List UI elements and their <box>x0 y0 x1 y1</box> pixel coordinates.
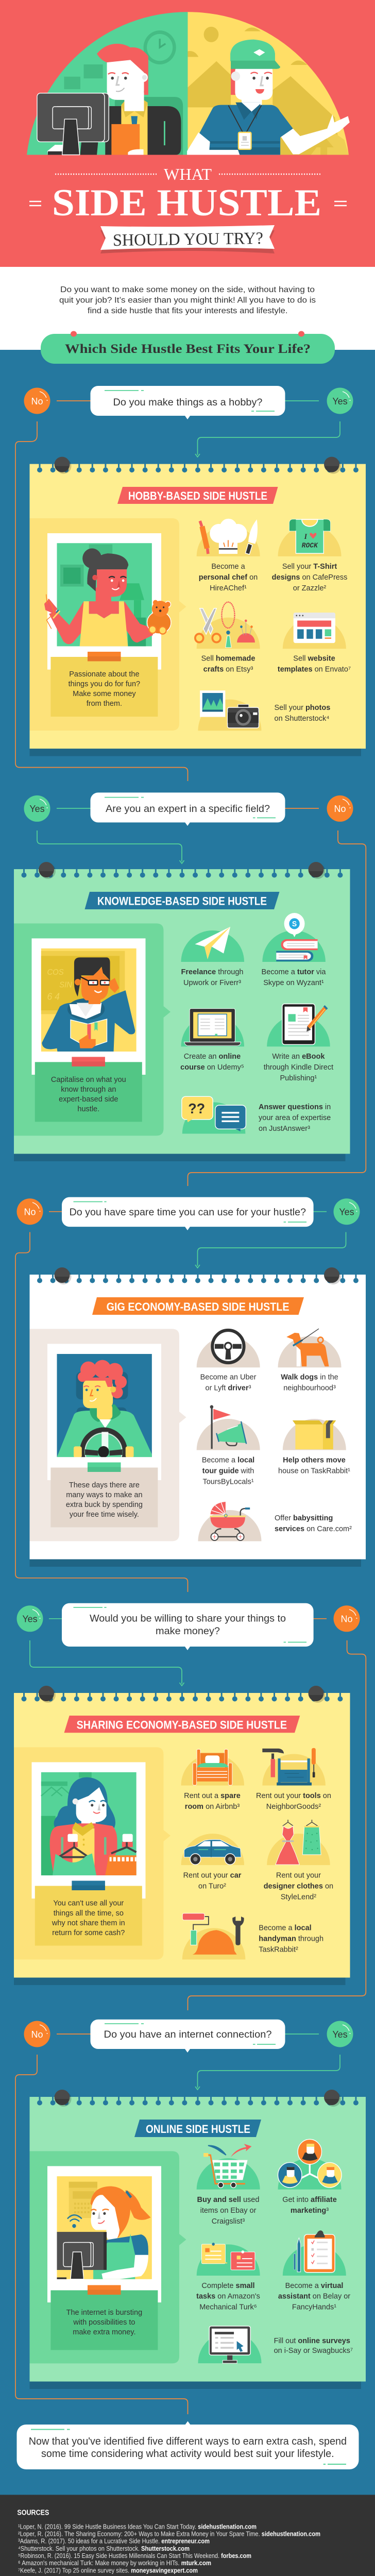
item: t-shirt designs: I <box>304 533 308 541</box>
no button <box>16 1198 43 1225</box>
closing message bubble: Now that you've identified five different ways to earn extra cash, spend <box>29 2436 347 2447</box>
banner: gig <box>92 1297 304 1315</box>
question 5: Do you have an internet connection? <box>104 2029 272 2040</box>
item: website templates: Sell website <box>293 654 335 663</box>
yes button: Yes <box>29 804 45 814</box>
item: walk dogs: Walk dogs in the <box>281 1374 338 1382</box>
item: buy and sell <box>197 2144 260 2226</box>
item: walk dogs <box>278 1329 342 1392</box>
item: freelance <box>181 927 244 987</box>
item: small tasks: Complete small <box>201 2282 255 2290</box>
item: babysitting <box>198 1502 352 1541</box>
banner: knowledge <box>84 892 279 909</box>
item: help others move <box>278 1419 350 1475</box>
illustration: studying teacher: 6 4 <box>47 991 60 1002</box>
caption: sharing: things all the time, so <box>54 1909 124 1918</box>
item: ebook: Write an eBook <box>272 1053 325 1061</box>
arrow: question 3 yes <box>195 1232 346 1268</box>
caption: hobby: from them. <box>87 700 122 708</box>
arrow: question 2 yes <box>37 831 184 863</box>
panel: sharing economy-based side hustle <box>14 1686 350 1985</box>
item: answer questions: on JustAnswer³ <box>259 1125 310 1133</box>
item: online surveys: on i-Say or Swagbucks⁷ <box>274 2347 353 2355</box>
item: buy and sell: Craigslist³ <box>212 2217 245 2226</box>
item: website templates <box>278 613 351 674</box>
question 4 <box>16 1603 360 1650</box>
item: spare room: Rent out a spare <box>184 1792 241 1800</box>
item: personal chef: Become a <box>211 563 246 571</box>
item: answer questions: ?? <box>188 1100 205 1116</box>
intro text: Do you want to make some money on the side, without having to <box>60 285 315 294</box>
closing message bubble: some time considering what activity would best suit your lifestyle. <box>41 2448 334 2460</box>
arrow: question 5 no <box>15 2055 187 2414</box>
banner: online: ONLINE SIDE HUSTLE <box>146 2123 250 2136</box>
item: affiliate marketing: marketing³ <box>291 2207 329 2215</box>
item: online surveys: Fill out online surveys <box>274 2337 350 2345</box>
intro text: find a side hustle that fits your interests and lifestyle. <box>88 307 287 315</box>
item: car: on Turo² <box>198 1883 226 1891</box>
item: tutor via skype: Become a tutor via <box>262 968 326 976</box>
item: tutor via skype <box>262 913 326 987</box>
caption: hobby: Passionate about the <box>69 670 140 679</box>
item: t-shirt designs: Sell your T-Shirt <box>282 563 337 571</box>
panel: sources: ⁷Keefe, J. (2017) Top 25 online survey sites. moneysavingexpert.com <box>18 2567 198 2574</box>
caption: gig: your free time wisely. <box>70 1511 139 1519</box>
question 1: Do you make things as a hobby? <box>113 397 263 408</box>
item: ebook: through Kindle Direct <box>264 1063 333 1072</box>
question 2: Are you an expert in a specific field? <box>106 803 270 815</box>
item: designer clothes <box>264 1820 333 1901</box>
card: gig <box>30 1267 366 1567</box>
arrow: yes path from question 1 <box>195 421 340 457</box>
caption: gig: many ways to make an <box>66 1491 143 1499</box>
caption: sharing <box>35 1880 142 1945</box>
item: freelance: Freelance through <box>181 968 243 976</box>
illustration: studying teacher: SIN <box>59 980 72 990</box>
item: uber driver <box>197 1330 260 1392</box>
item: tools <box>256 1748 331 1811</box>
item: website templates: templates on Envato⁷ <box>278 666 351 674</box>
item: designer clothes: StyleLend² <box>281 1893 316 1901</box>
illustration: driver <box>57 1354 152 1474</box>
item: t-shirt designs: designs on CafePress <box>272 573 347 582</box>
item: walk dogs: neighbourhood³ <box>283 1384 336 1392</box>
question 2 <box>24 792 353 826</box>
yes button <box>327 2021 353 2047</box>
arrow: question 4 yes <box>30 1640 184 1686</box>
item: tour guide <box>197 1405 260 1486</box>
banner: sharing: SHARING ECONOMY-BASED SIDE HUSTLE <box>77 1719 287 1732</box>
caption: online: make extra money. <box>73 2328 136 2336</box>
item: homemade crafts <box>195 602 260 674</box>
item: help others move: house on TaskRabbit¹ <box>278 1467 350 1475</box>
item: online surveys <box>198 2326 353 2363</box>
caption: gig <box>50 1462 158 1527</box>
item: photos: Sell your photos <box>274 704 330 712</box>
caption: knowledge: know through an <box>61 1086 116 1094</box>
no button: No <box>31 396 43 406</box>
item: tour guide: ToursByLocals¹ <box>202 1478 254 1486</box>
item: tutor via skype: Skype on Wyzant¹ <box>263 979 324 987</box>
yes button: Yes <box>22 1614 38 1624</box>
title: SIDE HUSTLE <box>52 182 321 224</box>
item: tools: NeighborGoods² <box>266 1803 321 1811</box>
yes button: Yes <box>332 396 348 406</box>
caption: hobby: things you do for fun? <box>69 680 140 688</box>
panel: sources: ⁴Shutterstock. Sell your photos on Shutterstock. Shutterstock.com <box>18 2545 190 2552</box>
banner: gig: GIG ECONOMY-BASED SIDE HUSTLE <box>107 1300 289 1313</box>
arrow: question 4 no <box>187 1640 366 2010</box>
illustration: studying teacher: COS <box>47 968 64 977</box>
card: hobby <box>30 457 366 756</box>
item: affiliate marketing: Get into affiliate <box>282 2196 337 2204</box>
ribbon: should you try: SHOULD YOU TRY? <box>113 229 263 250</box>
item: handyman: TaskRabbit² <box>259 1945 298 1954</box>
question 3 <box>16 1197 360 1230</box>
item: designer clothes: designer clothes on <box>264 1883 333 1891</box>
question 3: Do you have spare time you can use for your hustle? <box>70 1207 306 1218</box>
caption: online: with possibilities to <box>73 2318 135 2327</box>
item: online course: course on Udemy⁵ <box>180 1063 244 1072</box>
item: virtual assistant: Become a virtual <box>285 2282 343 2290</box>
banner: hobby: HOBBY-BASED SIDE HUSTLE <box>128 489 267 502</box>
arrow: question 5 yes <box>195 2055 340 2090</box>
banner: knowledge: KNOWLEDGE-BASED SIDE HUSTLE <box>97 894 267 908</box>
panel: sources <box>0 2495 375 2576</box>
yes button <box>16 1605 43 1632</box>
item: small tasks <box>196 2243 260 2311</box>
item: tour guide: Become a local <box>202 1456 254 1464</box>
caption: hobby <box>50 652 158 717</box>
banner: sharing <box>64 1716 300 1733</box>
card: sharing <box>14 1686 350 1985</box>
caption: online <box>50 2285 158 2350</box>
item: small tasks: Mechanical Turk⁶ <box>199 2303 257 2311</box>
item: ebook <box>264 1004 333 1082</box>
item: homemade crafts: Sell homemade <box>201 654 255 663</box>
item: buy and sell: Buy and sell used <box>197 2196 259 2204</box>
caption: knowledge: expert-based side <box>59 1095 118 1104</box>
item: photos <box>198 690 330 731</box>
item: virtual assistant: assistant on Belay or <box>278 2293 350 2301</box>
item: tools: Rent out your tools on <box>256 1792 331 1800</box>
yes button: Yes <box>339 1207 354 1217</box>
illustration: woman at computer <box>57 2176 152 2279</box>
item: personal chef <box>197 519 260 592</box>
item: ebook: Publishing¹ <box>280 1074 317 1082</box>
item: virtual assistant: FancyHands¹ <box>292 2303 336 2311</box>
item: tutor via skype: S <box>292 920 297 928</box>
illustration: woman with clothes <box>41 1772 137 1875</box>
header illustration: office worker and gig worker <box>27 12 350 155</box>
arrow: question 3 no <box>15 1232 187 1592</box>
no button <box>334 1605 360 1632</box>
banner: online <box>134 2120 261 2137</box>
item: handyman: handyman through <box>259 1935 323 1943</box>
panel: gig economy-based side hustle <box>30 1267 366 1567</box>
item: answer questions <box>182 1096 331 1134</box>
intro text: quit your job? It’s easier than you might think! All you have to do is <box>59 296 316 305</box>
no button <box>327 795 353 822</box>
item: homemade crafts: crafts on Etsy³ <box>203 666 253 674</box>
no button: No <box>340 1614 353 1624</box>
no button: No <box>24 1207 36 1217</box>
ribbon: should you try <box>100 225 275 253</box>
panel: sources: SOURCES <box>17 2509 49 2517</box>
item: online course: Create an online <box>184 1053 241 1061</box>
banner: hobby <box>117 487 278 504</box>
question 4: make money? <box>156 1625 220 1637</box>
item: car: Rent out your car <box>183 1871 242 1879</box>
panel: header <box>0 0 375 267</box>
panel: hobby-based side hustle <box>30 457 366 756</box>
item: t-shirt designs: or Zazzle² <box>293 584 326 592</box>
item: t-shirt designs <box>272 519 347 592</box>
card: online <box>30 2090 366 2389</box>
illustration: studying teacher <box>41 948 137 1052</box>
item: car <box>181 1834 244 1891</box>
card: knowledge <box>14 862 350 1161</box>
heading pill <box>41 331 335 364</box>
no button <box>24 387 50 414</box>
caption: sharing: return for some cash? <box>52 1929 125 1937</box>
item: virtual assistant <box>278 2230 350 2311</box>
caption: gig: These days there are <box>69 1481 140 1489</box>
question 5 <box>24 2020 353 2053</box>
item: babysitting: Offer babysitting <box>275 1514 333 1522</box>
item: buy and sell: items on Ebay or <box>200 2207 257 2215</box>
title: WHAT <box>164 165 212 183</box>
panel: sources: ⁵Robinson, R. (2016). 15 Easy Side Hustles Millennials Can Start This Weekend. forbes.com <box>18 2552 251 2560</box>
illustration: crafting woman <box>44 543 171 646</box>
item: personal chef: personal chef on <box>199 573 258 582</box>
item: small tasks: tasks on Amazon's <box>196 2293 260 2301</box>
no button: No <box>334 804 346 814</box>
item: uber driver: or Lyft driver³ <box>206 1384 251 1392</box>
heading pill: Which Side Hustle Best Fits Your Life? <box>65 342 311 356</box>
item: photos: on Shutterstock⁴ <box>274 715 329 723</box>
panel: sources: ³Adams, R. (2017). 50 ideas for a Lucrative Side Hustle. entrepreneur.com <box>18 2538 210 2545</box>
no button <box>24 2021 50 2047</box>
item: babysitting: services on Care.com² <box>275 1525 352 1533</box>
caption: knowledge: hustle. <box>77 1105 99 1113</box>
caption: sharing: You can't use all your <box>53 1900 124 1908</box>
caption: online: The internet is bursting <box>66 2309 142 2317</box>
caption: sharing: why not share them in <box>52 1919 125 1927</box>
item: answer questions: Answer questions in <box>259 1103 331 1111</box>
caption: knowledge <box>35 1057 142 1122</box>
caption: hobby: Make some money <box>73 690 136 698</box>
item: affiliate marketing <box>278 2139 342 2215</box>
question 4: Would you be willing to share your things to <box>90 1613 286 1624</box>
no button: No <box>31 2029 43 2040</box>
item: answer questions: your area of expertise <box>259 1114 331 1122</box>
panel: sources: ²Loper, R. (2016). The Sharing Economy: 200+ Ways to Make Extra Money in Your Spare Time. sidehustlenation.com <box>18 2531 320 2538</box>
yes button <box>334 1198 360 1225</box>
caption: knowledge: Capitalise on what you <box>51 1076 126 1084</box>
question 1 <box>24 386 353 419</box>
item: handyman: Become a local <box>259 1924 312 1933</box>
title <box>29 165 347 224</box>
yes button <box>327 387 353 414</box>
item: t-shirt designs: ROCK <box>302 541 318 550</box>
arrow: question 2 no <box>187 831 366 1186</box>
item: online course <box>180 1009 244 1072</box>
panel: sources: ⁶ Amazon's mechanical Turk: Make money by working in HITs. mturk.com <box>18 2560 211 2567</box>
intro text <box>59 285 316 315</box>
item: handyman <box>182 1913 323 1959</box>
panel: sources: ¹Loper, N. (2016). 99 Side Hustle Business Ideas You Can Start Today. sidehustlenation.com <box>18 2523 257 2530</box>
item: help others move: Help others move <box>283 1456 346 1464</box>
item: spare room: room on Airbnb³ <box>185 1803 240 1811</box>
arrow: no path from question 1 <box>15 421 187 781</box>
item: designer clothes: Rent out your <box>276 1871 321 1879</box>
closing message bubble <box>16 2421 359 2469</box>
item: spare room <box>181 1749 244 1811</box>
item: tour guide: tour guide with <box>202 1467 254 1475</box>
yes button: Yes <box>332 2029 348 2040</box>
panel: knowledge-based side hustle <box>14 862 350 1161</box>
panel: online side hustle <box>30 2090 366 2389</box>
yes button <box>24 795 50 822</box>
item: freelance: Upwork or Fiverr³ <box>183 979 241 987</box>
item: uber driver: Become an Uber <box>200 1374 257 1382</box>
caption: gig: extra buck by spending <box>66 1501 143 1509</box>
item: personal chef: HireAChef¹ <box>210 584 247 592</box>
